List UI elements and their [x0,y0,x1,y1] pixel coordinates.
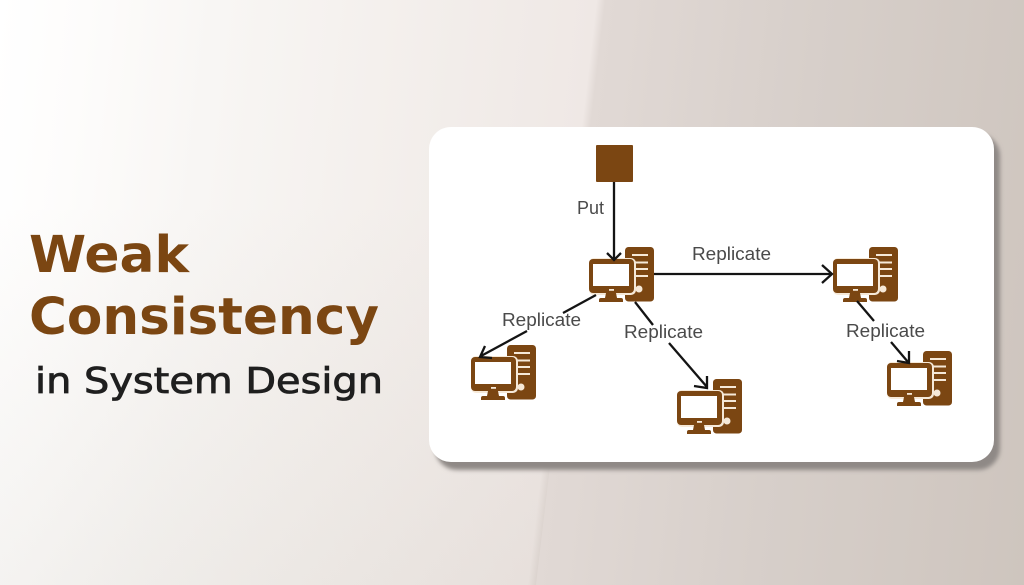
diagram labels [502,198,925,342]
client square [596,145,633,182]
server icons [471,247,952,434]
panel: diagram card [429,127,1000,470]
title: Weak [29,226,190,285]
diagram labels: Replicate [692,244,771,264]
title [29,226,383,402]
title: Consistency [29,288,379,347]
diagram labels: Replicate [624,322,703,342]
diagram labels: Replicate [502,310,581,330]
diagram labels: Replicate [846,321,925,341]
diagram labels: Put [577,198,604,218]
title: in System Design [35,361,383,402]
arrows [480,182,909,388]
